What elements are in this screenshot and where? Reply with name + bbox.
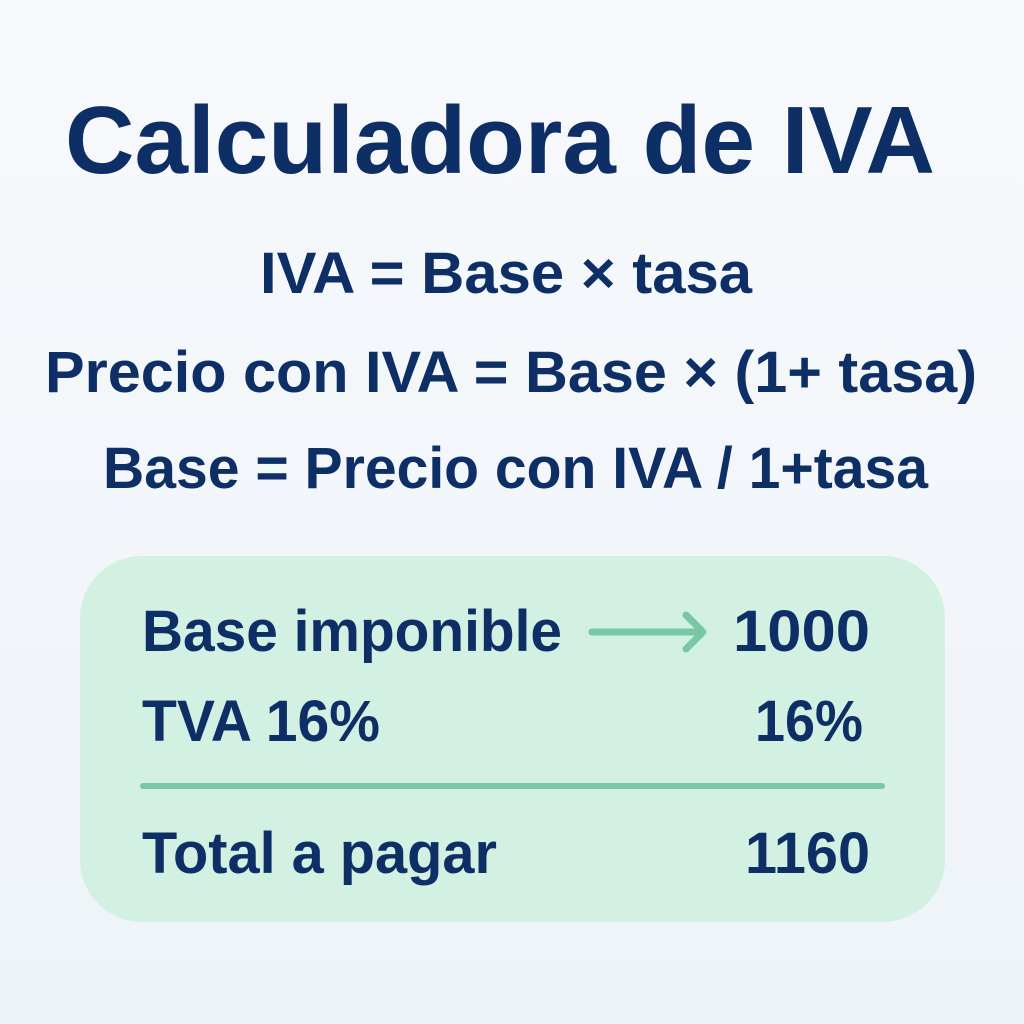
formulas [45, 241, 977, 501]
formula: IVA: IVA = Base × tasa [260, 241, 753, 306]
row: base imponible [142, 599, 870, 664]
row: TVA: 16% [755, 689, 863, 754]
row: total: 1160 [745, 821, 870, 886]
row: total: Total a pagar [142, 821, 497, 886]
arrow [592, 615, 703, 649]
panel: calculation [80, 556, 945, 922]
row: base imponible: Base imponible [142, 599, 562, 664]
formula: precio con IVA: Precio con IVA = Base × (1+ tasa) [45, 340, 977, 405]
title: Calculadora de IVA [65, 87, 935, 194]
row: base imponible: 1000 [733, 599, 870, 664]
formula: base: Base = Precio con IVA / 1+tasa [103, 436, 929, 501]
row: TVA: TVA 16% [142, 689, 380, 754]
row: total [142, 821, 870, 886]
row: TVA [142, 689, 863, 754]
